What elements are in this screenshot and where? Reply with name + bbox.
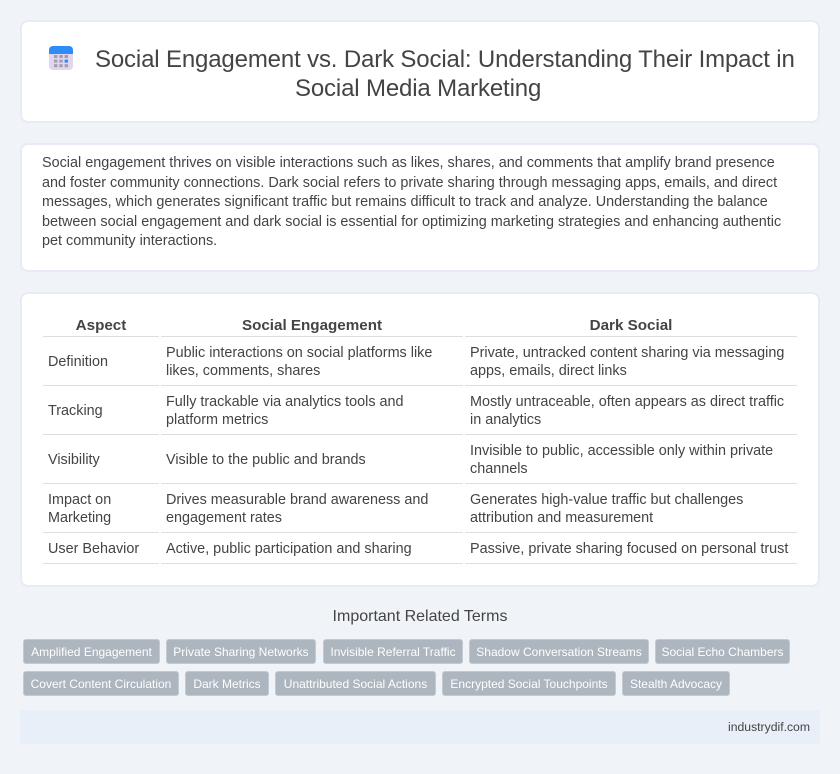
row: impact on marketing: Drives measurable brand awareness and [166,492,428,508]
row: visibility: Visibility [48,452,100,468]
tags: related terms: Invisible Referral Traffic [330,645,456,659]
row: definition: likes, comments, shares [166,363,320,379]
text block: introduction: messages, which generates significant traffic but remains difficult to track and analyze. Understanding the balance [42,194,768,210]
row: tracking: in analytics [470,412,541,428]
row: definition: Private, untracked content sharing via messaging [470,345,784,361]
text block: introduction: and foster community connections. Dark social refers to private sharing through messaging apps, emails, and direct [42,175,777,191]
title: Social Engagement vs. Dark Social: Understanding Their Impact in [95,46,795,73]
row: visibility: Invisible to public, accessible only within private [470,443,773,459]
footer credit: industrydif.com [728,720,810,734]
row: visibility: channels [470,461,528,477]
tags: related terms: Encrypted Social Touchpoints [450,677,608,691]
row: definition: apps, emails, direct links [470,363,627,379]
row: impact on marketing: Impact on [48,492,111,508]
table header: Aspect [76,317,126,334]
row: user behavior: Passive, private sharing focused on personal trust [470,541,788,557]
row: user behavior [48,541,788,557]
row: tracking: Fully trackable via analytics tools and [166,394,404,410]
text block: introduction [42,155,781,249]
row: impact on marketing: engagement rates [166,510,282,526]
heading: important related terms: Important Related Terms [333,608,507,625]
row: impact on marketing: attribution and measurement [470,510,653,526]
footer [20,710,820,744]
row: tracking: Tracking [48,403,103,419]
row: definition [48,345,784,379]
tags: related terms: Social Echo Chambers [661,645,784,659]
row: tracking: Mostly untraceable, often appears as direct traffic [470,394,784,410]
row: user behavior: Active, public participation and sharing [166,541,412,557]
table header [76,317,672,334]
row: visibility: Visible to the public and brands [166,452,366,468]
tags: related terms: Stealth Advocacy [630,677,722,691]
tags: related terms: Amplified Engagement [31,645,152,659]
tags: related terms: Dark Metrics [193,677,261,691]
title: Social Media Marketing [295,75,541,102]
title [95,46,795,102]
row: impact on marketing: Generates high-value traffic but challenges [470,492,743,508]
row: tracking [48,394,784,428]
panel: header [20,20,820,123]
text block: introduction: between social engagement and dark social is essential for optimizing marketing strategies and enhancing authentic [42,214,781,230]
row: tracking: platform metrics [166,412,268,428]
tags: related terms: Unattributed Social Actions [284,677,427,691]
text block: introduction: Social engagement thrives on visible interactions such as likes, shares, and comments that amplify brand presence [42,155,775,171]
row: impact on marketing: Marketing [48,510,111,526]
row: definition: Definition [48,354,108,370]
tags: related terms: Shadow Conversation Streams [476,645,642,659]
icon: calendar [49,46,73,70]
row: impact on marketing [48,492,743,526]
row: definition: Public interactions on social platforms like [166,345,432,361]
tags: related terms: Private Sharing Networks [173,645,309,659]
row: visibility [48,443,773,477]
table header: Dark Social [590,317,672,334]
tags: related terms: Covert Content Circulation [31,677,171,691]
panel: introduction [20,143,820,272]
table header: Social Engagement [242,317,382,334]
text block: introduction: pet community interactions. [42,233,217,249]
row: user behavior: User Behavior [48,541,139,557]
panel: comparison table [20,292,820,587]
tags: related terms [23,639,790,696]
